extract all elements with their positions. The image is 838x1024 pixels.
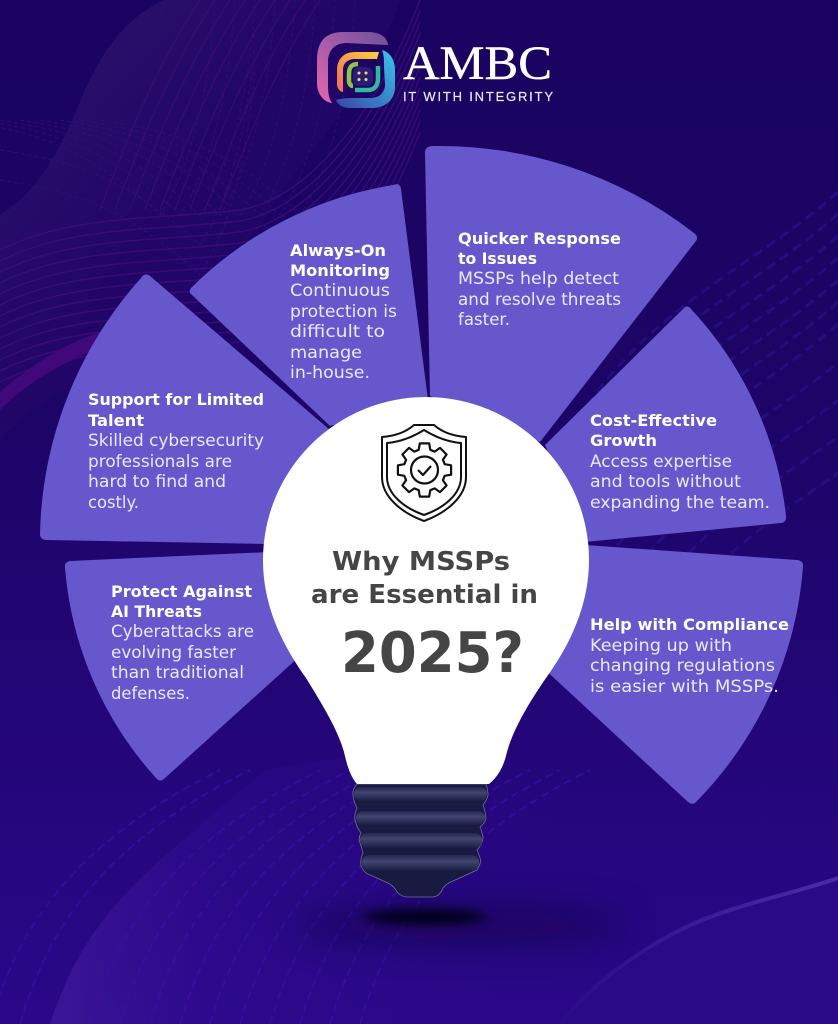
panel: support for limited talent: Skilled cybersecurity (88, 431, 264, 450)
panel: cost-effective growth: Cost-Effective (590, 411, 717, 430)
panel: cost-effective growth: Access expertise (590, 452, 732, 471)
panel: always-on monitoring: Always-On (290, 241, 386, 260)
panel: help with compliance: is easier with MSSPs. (590, 677, 779, 696)
panel: help with compliance: changing regulations (590, 656, 775, 675)
panel: always-on monitoring: protection is (290, 302, 397, 321)
panel: always-on monitoring: Continuous (290, 281, 390, 300)
panel: always-on monitoring (190, 184, 428, 426)
panel: support for limited talent: professionals are (88, 452, 232, 471)
panel: cost-effective growth: and tools without (590, 472, 742, 491)
bulb body (263, 397, 589, 784)
panel: protect against AI threats: evolving faster (111, 643, 236, 662)
panel: quicker response: to Issues (458, 249, 537, 268)
panel: quicker response: MSSPs help detect (458, 269, 620, 288)
panel: always-on monitoring: manage (290, 343, 362, 362)
logo tagline: IT WITH INTEGRITY (403, 89, 553, 104)
panel: cost-effective growth: Growth (590, 431, 657, 450)
logo (317, 32, 553, 108)
panel: cost-effective growth: expanding the team. (590, 493, 770, 512)
panel: help with compliance: Keeping up with (590, 636, 732, 655)
panel: help with compliance (540, 545, 803, 804)
panel: support for limited talent: Support for Limited (88, 390, 264, 409)
panel: protect against AI threats: Cyberattacks are (111, 622, 254, 641)
panel: support for limited talent: costly. (88, 493, 139, 512)
title: Why MSSPs (332, 547, 510, 577)
title (311, 547, 538, 686)
icon: bulb shadow (290, 909, 630, 941)
logo wordmark: AMBC (403, 37, 552, 90)
icon: AMBC logo mark (317, 32, 395, 108)
panel: support for limited talent: Talent (88, 411, 144, 430)
title: are Essential in (311, 580, 538, 610)
panel: protect against AI threats: Protect Against (111, 582, 252, 601)
panel: always-on monitoring: difficult to (290, 322, 385, 341)
panel: protect against AI threats: defenses. (111, 684, 190, 703)
panel: protect against AI threats: than traditional (111, 663, 244, 682)
panel: quicker response: Quicker Response (458, 229, 621, 248)
panel: protect against AI threats: AI Threats (111, 602, 202, 621)
panel: quicker response: and resolve threats (458, 290, 621, 309)
panel: protect against AI threats (65, 552, 300, 780)
icon: bulb screw base (353, 784, 488, 897)
panel: quicker response: faster. (458, 310, 510, 329)
panel: cost-effective growth (545, 306, 786, 542)
panel: help with compliance: Help with Compliance (590, 615, 789, 634)
panel: always-on monitoring: Monitoring (290, 261, 390, 280)
title: 2025? (341, 621, 524, 686)
panel: support for limited talent (40, 274, 330, 544)
panel: support for limited talent: hard to find and (88, 472, 226, 491)
icon: shield with gear and check (382, 425, 466, 521)
panel: always-on monitoring: in-house. (290, 363, 370, 382)
panel: quicker response (425, 146, 697, 442)
